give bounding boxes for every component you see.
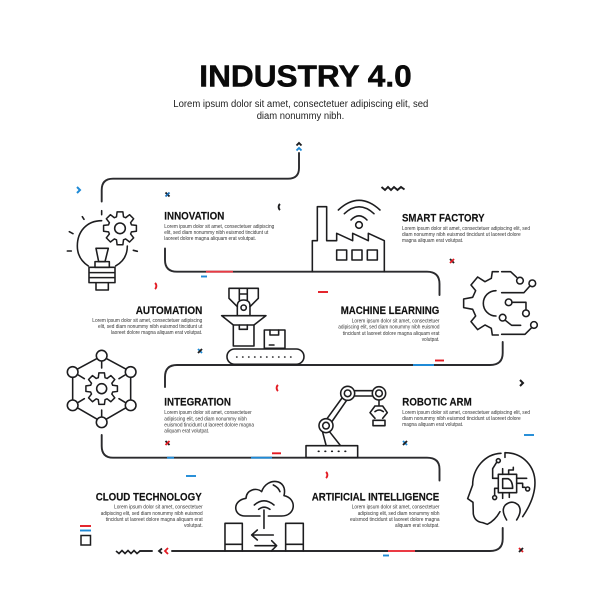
text: machine learning: adipiscing elit, sed diam nonummy nibh euismod: [338, 325, 440, 331]
heading: cloud technology: CLOUD TECHNOLOGY: [96, 491, 202, 503]
subtitle: diam nonummy nibh.: [257, 111, 344, 122]
panel: cloud technology: [96, 481, 303, 551]
text: machine learning: volutpat.: [422, 337, 440, 343]
text: integration: adipiscing elit, sed diam nonummy nibh: [164, 416, 247, 422]
text: artificial intelligence: adipiscing elit, sed diam nonummy nibh: [358, 511, 440, 517]
panel: automation: [92, 288, 304, 364]
panel: innovation: [67, 210, 274, 290]
text: robotic arm: [402, 410, 530, 428]
text: robotic arm: diam nonummy nibh euismod tincidunt ut laoreet dolore: [402, 416, 521, 422]
text: cloud technology: volutpat.: [184, 523, 203, 529]
text: cloud technology: [101, 505, 203, 529]
heading: artificial intelligence: ARTIFICIAL INTELLIGENCE: [312, 491, 439, 503]
text: machine learning: [338, 319, 440, 343]
text: artificial intelligence: euismod tincidunt ut laoreet dolore magna: [350, 517, 440, 523]
text: integration: Lorem ipsum dolor sit amet, consectetuer: [164, 410, 252, 416]
icon: robotic arm: [306, 386, 387, 458]
panel: smart factory: [312, 200, 530, 272]
text: cloud technology: Lorem ipsum dolor sit amet, consectetuer: [114, 505, 203, 511]
start arrow chevrons: [296, 143, 302, 150]
icon: AI head with chip: [468, 453, 535, 524]
title: INDUSTRY 4.0: [199, 60, 412, 94]
connector path: [102, 153, 503, 551]
decorative marks: [77, 187, 534, 556]
text: cloud technology: tincidunt ut laoreet dolore magna aliquam erat: [106, 517, 203, 523]
text: automation: Lorem ipsum dolor sit amet, consectetuer adipiscing: [92, 318, 202, 324]
text: machine learning: tincidunt ut laoreet dolore magna aliquam erat: [343, 331, 440, 337]
text: integration: euismod tincidunt ut laoreet dolore magna: [164, 422, 254, 428]
text: artificial intelligence: [350, 505, 440, 529]
subtitle: [173, 99, 428, 122]
text: artificial intelligence: aliquam erat volutpat.: [395, 523, 440, 529]
text: automation: laoreet dolore magna aliquam erat volutpat.: [111, 330, 202, 336]
panel: robotic arm: [306, 386, 530, 458]
text: innovation: Lorem ipsum dolor sit amet, consectetuer adipiscing: [164, 224, 274, 230]
text: smart factory: magna aliquam erat volutpat.: [402, 238, 463, 244]
text: robotic arm: magna aliquam erat volutpat.: [402, 422, 463, 428]
text: automation: [92, 318, 203, 336]
icon: light bulb with gear: [67, 211, 137, 290]
text: smart factory: Lorem ipsum dolor sit amet, consectetuer adipiscing elit, sed: [402, 226, 530, 232]
icon: hexagon network with gear: [67, 350, 136, 428]
text: automation: elit, sed diam nonummy nibh euismod tincidunt ut: [98, 324, 203, 330]
icon: factory with wifi: [312, 200, 384, 272]
heading: integration: INTEGRATION: [164, 397, 231, 409]
text: integration: [164, 410, 254, 434]
text: smart factory: [402, 226, 530, 244]
text: artificial intelligence: Lorem ipsum dolor sit amet, consectetuer: [352, 505, 440, 511]
text: innovation: elit, sed diam nonummy nibh euismod tincidunt ut: [164, 230, 269, 236]
text: robotic arm: Lorem ipsum dolor sit amet, consectetuer adipiscing elit, sed: [402, 410, 530, 416]
text: integration: aliquam erat volutpat.: [164, 428, 209, 434]
heading: automation: AUTOMATION: [136, 305, 202, 317]
subtitle: Lorem ipsum dolor sit amet, consectetuer adipiscing elit, sed: [173, 99, 428, 110]
icon: cloud transfer: [225, 481, 303, 551]
panel: machine learning: [338, 272, 537, 343]
text: machine learning: Lorem ipsum dolor sit amet, consectetuer: [352, 319, 440, 325]
text: innovation: laoreet dolore magna aliquam erat volutpat.: [164, 236, 256, 242]
colored path accents: [167, 272, 434, 551]
heading: smart factory: SMART FACTORY: [402, 213, 484, 225]
icon: circuit gear: [464, 272, 537, 335]
heading: robotic arm: ROBOTIC ARM: [402, 397, 472, 409]
panel: integration: [67, 350, 254, 434]
text: smart factory: diam nonummy nibh euismod tincidunt ut laoreet dolore: [402, 232, 521, 238]
heading: machine learning: MACHINE LEARNING: [341, 305, 439, 317]
text: cloud technology: adipiscing elit, sed diam nonummy nibh euismod: [101, 511, 203, 517]
panel: artificial intelligence: [312, 453, 535, 529]
icon: conveyor robot: [222, 288, 304, 364]
text: innovation: [164, 224, 274, 242]
heading: innovation: INNOVATION: [164, 210, 224, 222]
